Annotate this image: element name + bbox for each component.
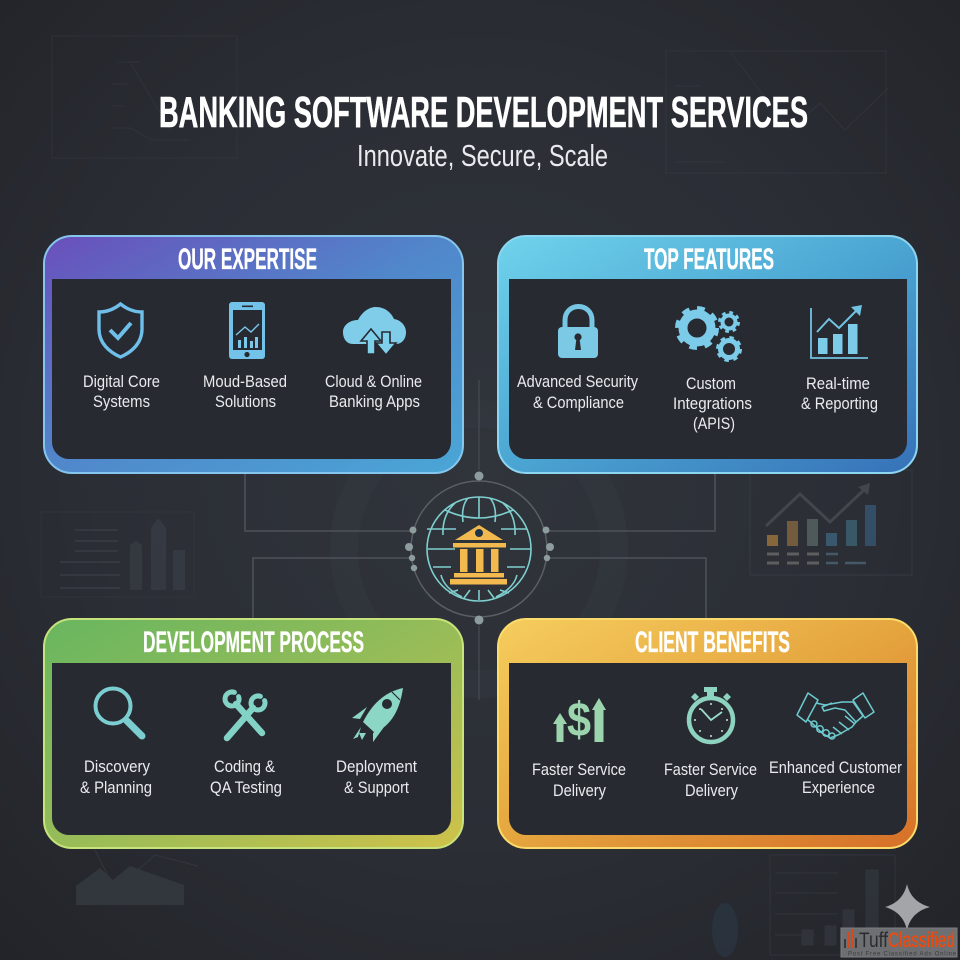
item: moud-based solutions	[203, 373, 287, 411]
heading: CLIENT BENEFITS	[635, 626, 790, 659]
item: custom integrations	[673, 375, 752, 433]
watermark logo	[841, 928, 957, 958]
item: custom integrations: Integrations	[673, 395, 752, 413]
icon: padlock	[558, 306, 598, 358]
item: coding and qa testing: Coding &	[214, 758, 275, 776]
item: advanced security and compliance: & Compliance	[533, 394, 624, 412]
item: deployment and support	[336, 758, 417, 797]
panel: our expertise	[44, 236, 463, 473]
icon: phone	[229, 302, 265, 359]
logo tagline: Post Free Classified Ads Online	[848, 952, 957, 958]
bank building	[450, 525, 507, 584]
subtitle: Innovate, Secure, Scale	[357, 138, 608, 173]
icon: bar chart	[811, 305, 868, 358]
item: coding and qa testing: QA Testing	[210, 779, 282, 797]
item: digital core systems: Systems	[93, 393, 150, 411]
item: advanced security and compliance	[517, 373, 639, 412]
icon: dollar with arrows	[553, 694, 606, 747]
item: real-time reporting: Real-time	[806, 375, 870, 393]
logo bars	[844, 929, 857, 948]
icon: gears	[678, 308, 740, 360]
icon: handshake	[797, 693, 874, 739]
panel: top features	[498, 236, 917, 473]
faint chart: left middle	[41, 512, 194, 597]
item: cloud and online banking apps	[325, 373, 422, 411]
icon: magnifying glass	[96, 688, 142, 736]
faint chart: right middle	[750, 470, 912, 575]
logo wordmark: Tuff	[859, 929, 888, 952]
central globe emblem	[405, 472, 554, 624]
faint chart: top left	[52, 36, 237, 158]
item: discovery and planning	[80, 758, 152, 797]
faint chart: bottom left	[76, 850, 198, 905]
item: enhanced customer experience	[769, 759, 902, 797]
item: faster service delivery: Faster Service	[532, 761, 626, 779]
item: faster service delivery: Delivery	[553, 782, 607, 800]
heading: OUR EXPERTISE	[178, 243, 317, 276]
globe	[427, 497, 531, 601]
item: faster service delivery second	[664, 761, 757, 800]
item: custom integrations: (APIS)	[693, 415, 735, 433]
item: custom integrations: Custom	[686, 375, 736, 393]
item: real-time reporting	[801, 375, 878, 413]
connector lines	[245, 380, 715, 700]
item: discovery and planning: Discovery	[84, 758, 151, 776]
faint chart: bottom right	[770, 855, 895, 955]
heading: DEVELOPMENT PROCESS	[143, 626, 364, 659]
item: discovery and planning: & Planning	[80, 779, 152, 797]
item: enhanced customer experience: Experience	[802, 779, 875, 797]
item: faster service delivery second: Faster Service	[664, 761, 757, 779]
icon: stopwatch	[689, 687, 733, 742]
panel: client benefits	[498, 619, 917, 848]
item: digital core systems	[83, 373, 160, 411]
panel: development process	[44, 619, 463, 848]
item: enhanced customer experience: Enhanced Customer	[769, 759, 902, 777]
item: faster service delivery second: Delivery	[685, 782, 739, 800]
node dots	[405, 472, 554, 624]
item: advanced security and compliance: Advanced Security	[517, 373, 639, 391]
icon: sparkle	[885, 884, 930, 930]
item: digital core systems: Digital Core	[83, 373, 160, 391]
icon: shield	[99, 304, 142, 357]
icon: dollar with arrows: $	[567, 694, 591, 747]
icon: rocket	[352, 688, 403, 742]
item: cloud and online banking apps: Banking Apps	[329, 393, 420, 411]
item: deployment and support: & Support	[344, 779, 409, 797]
item: coding and qa testing	[210, 758, 282, 797]
icon: cloud	[343, 307, 406, 355]
item: real-time reporting: & Reporting	[801, 395, 878, 413]
item: moud-based solutions: Moud-Based	[203, 373, 287, 391]
item: deployment and support: Deployment	[336, 758, 417, 776]
heading: TOP FEATURES	[644, 243, 774, 276]
item: cloud and online banking apps: Cloud & Online	[325, 373, 422, 391]
faint chart: top right	[666, 51, 888, 173]
item: moud-based solutions: Solutions	[215, 393, 276, 411]
item: faster service delivery	[532, 761, 626, 800]
icon: tools	[225, 692, 265, 738]
